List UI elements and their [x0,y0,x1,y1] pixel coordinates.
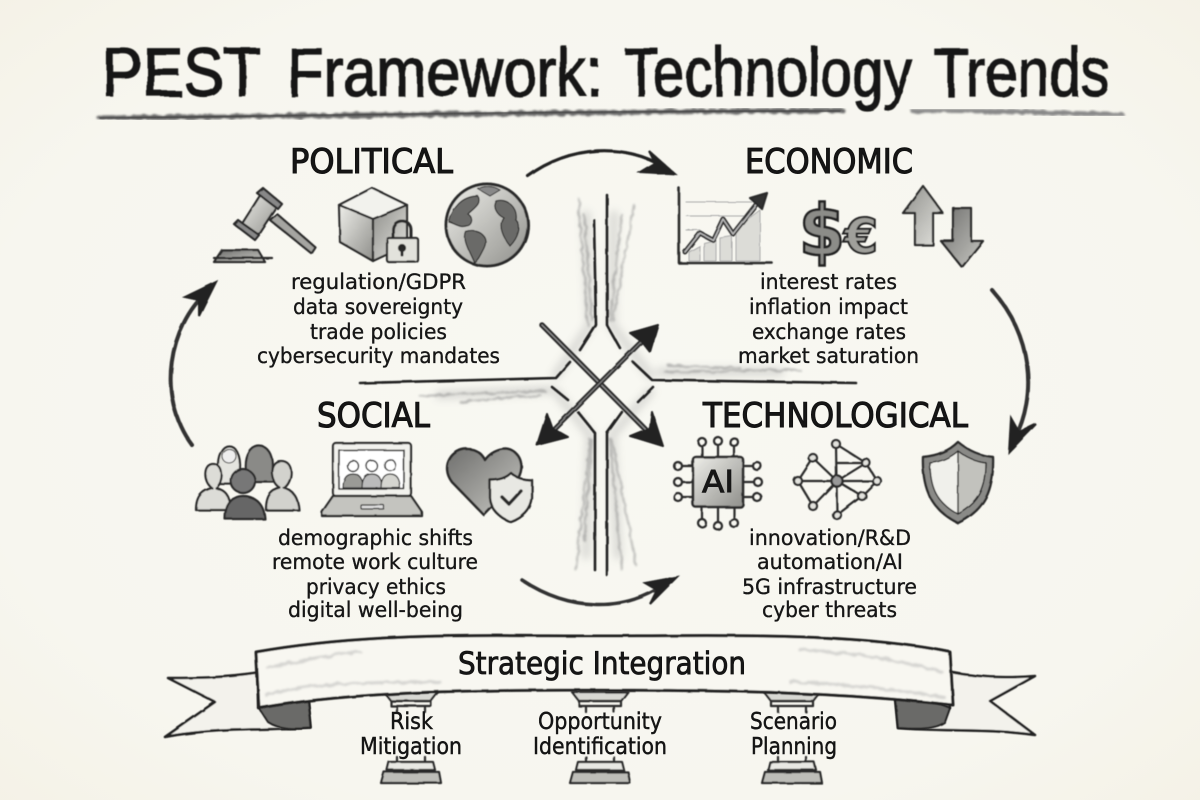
icon: AI chip [674,437,762,530]
cycle arrow: social to technological [522,577,677,605]
label: risk mitigation [360,709,462,760]
pillars under banner [381,692,822,783]
text list: political factors: regulation/GDPR [291,270,466,294]
cycle arrow: economic to technological [992,290,1036,452]
banner ribbon [165,636,1035,737]
label: opportunity identification [533,709,667,760]
ribbon front panel [256,636,953,708]
icon: heart with shield [447,449,532,522]
ribbon shading strokes [266,650,945,698]
text list: political factors: cybersecurity mandates [257,344,500,368]
title: PEST [102,34,261,111]
pillar: risk mitigation [381,692,441,783]
text list: economic factors: market saturation [738,344,919,368]
panel: economic [679,142,983,368]
icon: laptop video call [322,443,422,516]
text list: technological factors: automation/AI [757,550,903,574]
title [102,34,1110,111]
heading: economic: ECONOMIC [745,142,913,182]
icon: currency symbols: € [843,209,878,265]
icon: gavel [214,188,315,262]
text list: political factors: trade policies [310,320,447,344]
icon: up and down arrows [903,186,983,267]
icon: network graph [794,440,881,519]
title: Technology [624,34,912,111]
heading: political: POLITICAL [290,142,453,182]
text list: technological factors: innovation/R&D [749,526,911,550]
icon: shield [923,442,993,523]
center crossroads background [360,195,856,575]
icon: globe [446,184,528,266]
text list: economic factors: exchange rates [752,320,906,344]
center crossing arrows [537,325,663,446]
text list: social factors: remote work culture [272,550,478,574]
label: opportunity identification: Opportunity [538,709,662,735]
panel: technological [674,396,993,622]
panel: political [214,142,528,368]
text list: economic factors: interest rates [760,270,897,294]
title underline [100,110,1122,118]
pillar: opportunity identification [570,692,630,783]
panel: social [196,396,532,622]
heading: social: SOCIAL [317,396,430,436]
text list: economic factors: inflation impact [749,295,908,319]
label: opportunity identification: Identification [533,734,667,760]
text list: social factors [272,526,478,622]
label: scenario planning [750,709,837,760]
text list: political factors: data sovereignty [293,295,463,319]
label: scenario planning: Scenario [750,709,837,735]
icon: currency symbols [799,190,878,272]
label: risk mitigation: Mitigation [360,734,462,760]
banner heading: Strategic Integration [458,646,746,682]
text list: economic factors [738,270,919,368]
icon: data cube with lock [339,188,418,262]
icon: AI chip: AI [702,465,734,500]
cycle arrow: political to economic [528,151,675,176]
cycle arrow: social to political [171,282,216,445]
icon: currency symbols: $ [799,190,845,272]
heading: technological: TECHNOLOGICAL [702,396,968,436]
icon: group of people [196,446,299,519]
pillar: scenario planning [762,692,822,783]
text list: social factors: digital well-being [288,598,463,622]
title: Trends [933,34,1110,111]
title: Framework: [287,34,603,111]
text list: technological factors: cyber threats [762,598,897,622]
icon: growth chart [679,188,772,263]
label: scenario planning: Planning [751,734,837,760]
text list: political factors [257,270,500,368]
ribbon right fold shadow [895,697,950,729]
ribbon left fold shadow [259,697,311,729]
ribbon right tail [895,672,1035,735]
label: risk mitigation: Risk [390,709,434,735]
text list: technological factors [742,526,917,622]
text list: social factors: privacy ethics [306,575,446,599]
text list: technological factors: 5G infrastructure [742,575,917,599]
text list: social factors: demographic shifts [278,526,473,550]
ribbon left tail [165,673,311,737]
